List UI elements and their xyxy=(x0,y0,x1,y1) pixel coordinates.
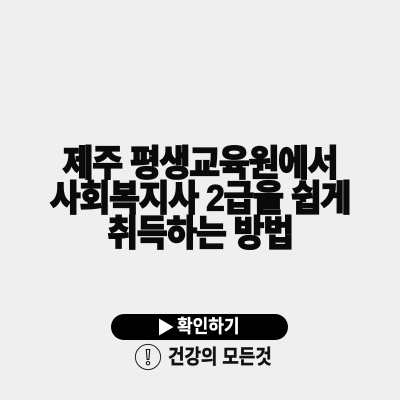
icon: play triangle xyxy=(159,318,174,336)
button label: 확인하기 xyxy=(177,316,240,337)
icon: exclamation circle xyxy=(134,344,162,370)
title: 제주 평생교육원에서 xyxy=(63,145,337,184)
title: 취득하는 방법 xyxy=(107,215,293,254)
button: 확인하기 xyxy=(111,314,288,340)
title: 사회복지사 2급을 쉽게 xyxy=(50,180,350,219)
title xyxy=(50,144,350,254)
brand text: 건강의 모든것 xyxy=(168,346,272,368)
